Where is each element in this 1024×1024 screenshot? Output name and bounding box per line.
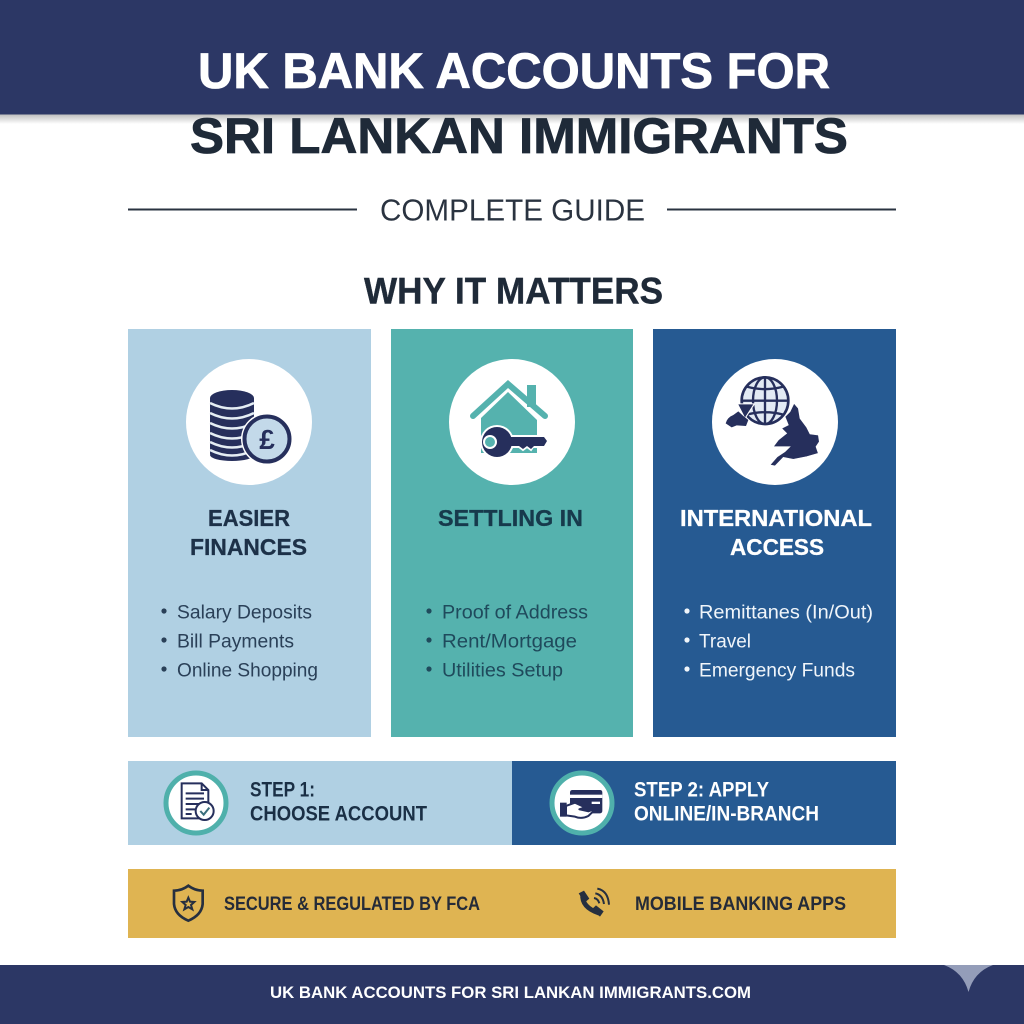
- header band: [0, 0, 1024, 124]
- panel: international access: [653, 329, 896, 737]
- heading: settling in: SETTLING IN: [438, 505, 583, 531]
- title: [190, 43, 848, 164]
- step 1 text: STEP 1:: [250, 778, 315, 802]
- list: easier finances: Bill Payments: [177, 632, 294, 652]
- heading: international access: ACCESS: [730, 534, 824, 560]
- list: settling in: Utilities Setup: [442, 660, 563, 682]
- icon: globe and UK map: [726, 377, 819, 466]
- step 1 text: CHOOSE ACCOUNT: [250, 802, 427, 826]
- panel: easier finances: [128, 329, 371, 737]
- heading: easier finances: FINANCES: [190, 534, 307, 560]
- step 2 text: [634, 778, 819, 826]
- heading: easier finances: EASIER: [208, 505, 290, 531]
- list: international access: Travel: [699, 632, 751, 652]
- heading: easier finances: [190, 505, 307, 560]
- icon: coins and pound: [210, 390, 293, 465]
- subtitle with rules: COMPLETE GUIDE: [380, 192, 645, 228]
- list: easier finances: Online Shopping: [177, 660, 318, 682]
- step 1 text: [250, 778, 427, 826]
- step 2: [512, 761, 896, 845]
- icon: hand holding card: [560, 790, 602, 818]
- list: international access: Remittanes (In/Out): [699, 602, 873, 624]
- step 1: [128, 761, 512, 845]
- panel: settling in: [391, 329, 633, 737]
- step 2 text: STEP 2: APPLY: [634, 778, 769, 802]
- list: settling in: Proof of Address: [442, 602, 588, 624]
- heading: international access: [680, 505, 872, 560]
- heading: international access: INTERNATIONAL: [680, 505, 872, 531]
- step 2 text: ONLINE/IN-BRANCH: [634, 802, 819, 826]
- list: international access: Emergency Funds: [699, 660, 855, 682]
- section heading: WHY IT MATTERS: [364, 270, 663, 312]
- title: UK BANK ACCOUNTS FOR: [198, 43, 830, 99]
- icon: coins and pound: £: [259, 424, 275, 455]
- feature text: apps: MOBILE BANKING APPS: [635, 894, 846, 915]
- list: easier finances: [161, 602, 318, 682]
- icon: document with check: [182, 783, 214, 820]
- icon: house and key: [473, 384, 547, 459]
- footer: UK BANK ACCOUNTS FOR SRI LANKAN IMMIGRANTS.COM: [270, 983, 751, 1002]
- icon: shield with star: [174, 886, 203, 921]
- feature text: FCA: SECURE & REGULATED BY FCA: [224, 894, 480, 915]
- feature bar: [128, 869, 896, 938]
- title: SRI LANKAN IMMIGRANTS: [190, 108, 848, 164]
- list: settling in: [426, 602, 588, 682]
- list: international access: [684, 602, 873, 682]
- list: settling in: Rent/Mortgage: [442, 632, 577, 652]
- footer: [0, 965, 1024, 1024]
- icon: phone: [579, 889, 609, 917]
- list: easier finances: Salary Deposits: [177, 602, 312, 624]
- icon: sparkle: [944, 965, 993, 992]
